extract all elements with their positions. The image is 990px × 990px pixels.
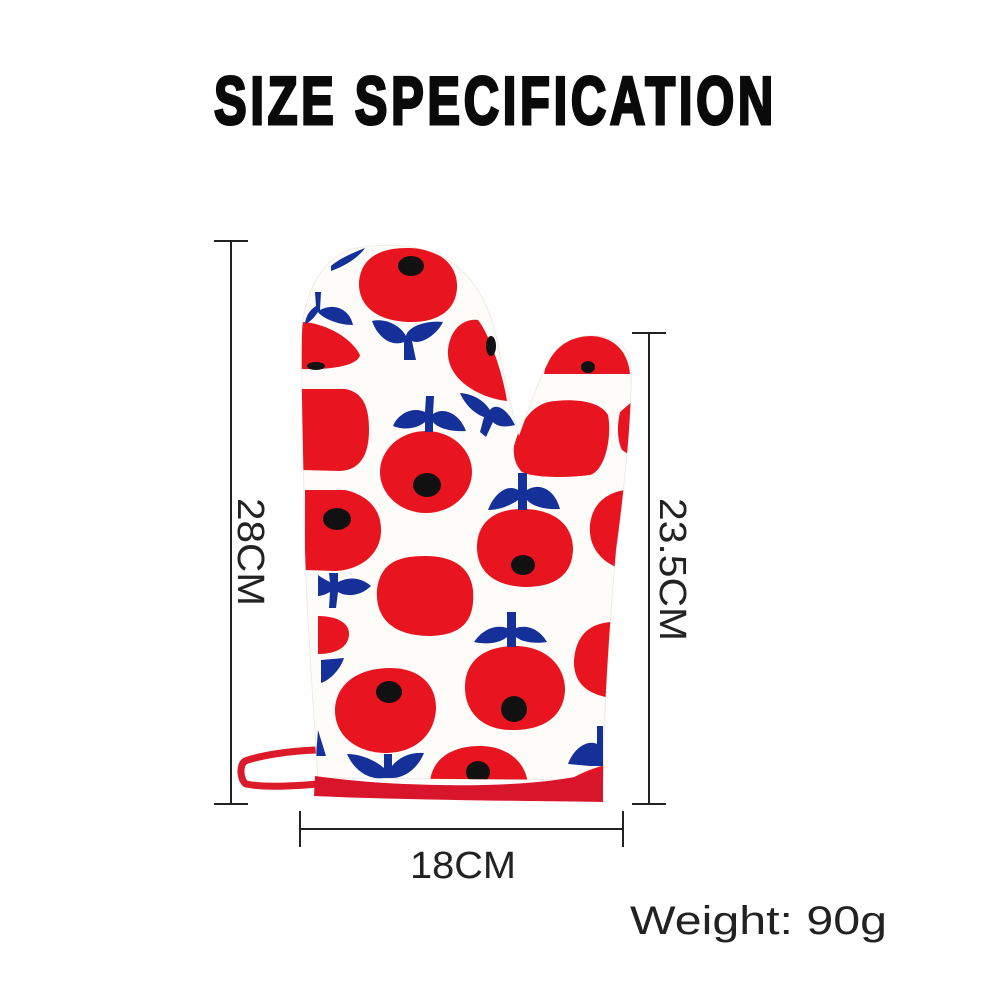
oven mitt illustration [241, 245, 634, 802]
title: SIZE SPECIFICATION [214, 62, 777, 139]
bottom binding [314, 770, 603, 802]
dimension: 23.5CM height [632, 333, 693, 804]
dimension: 23.5CM height: 23.5CM [651, 498, 693, 641]
dimension: 28CM height: 28CM [229, 498, 271, 606]
mitt flower pattern [300, 248, 634, 795]
weight label: Weight: 90g [630, 899, 887, 943]
dimension: 18CM width: 18CM [410, 845, 516, 887]
mitt body [302, 245, 631, 780]
dimension: 18CM width [300, 811, 623, 887]
hanging loop [241, 750, 318, 786]
dimension: 28CM height [214, 241, 271, 804]
